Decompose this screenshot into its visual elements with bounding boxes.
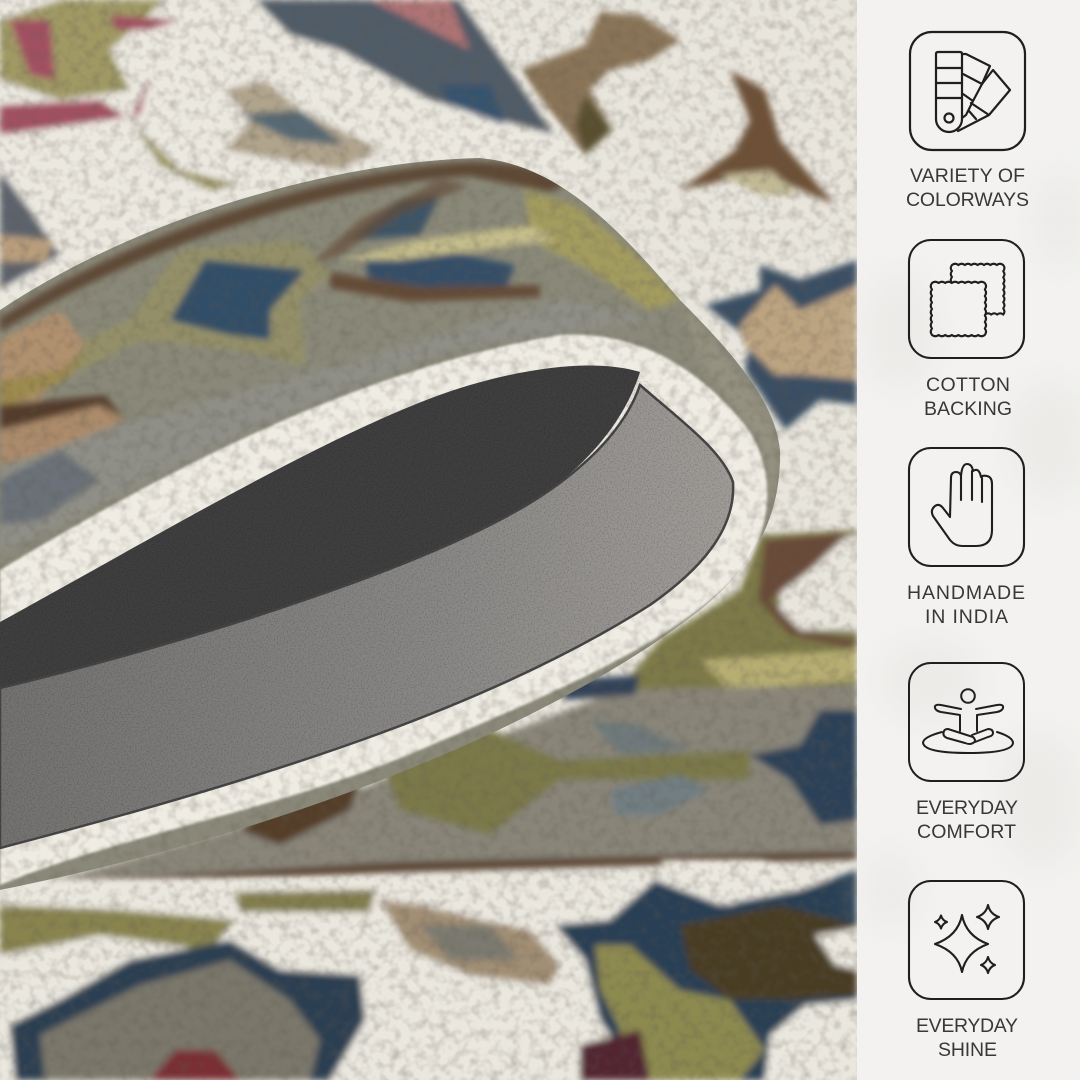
icon: open hand	[909, 448, 1024, 566]
label: VARIETY OF	[910, 165, 1025, 187]
grey rug backing, lower fold	[0, 385, 733, 848]
feature: everyday comfort	[909, 663, 1024, 843]
sidebar panel	[857, 0, 1080, 1080]
feature: variety of colorways	[906, 32, 1029, 211]
feature: variety of colorways: COLORWAYS	[906, 189, 1029, 211]
icon: seated meditation figure	[909, 663, 1024, 781]
loop pile texture	[0, 0, 857, 1080]
rug lower field and border band	[40, 530, 857, 888]
fine weave texture on the backing	[0, 366, 732, 848]
icon: sparkles	[909, 881, 1024, 999]
feature: handmade in india: IN INDIA	[925, 606, 1008, 628]
white rim of the roll	[0, 335, 767, 885]
feature: everyday shine	[909, 881, 1024, 1061]
label: EVERYDAY	[916, 797, 1018, 819]
feature: cotton backing	[909, 240, 1024, 420]
label: EVERYDAY	[916, 1015, 1018, 1037]
icon: colour fan deck	[910, 32, 1025, 150]
icon: fabric swatches	[909, 240, 1024, 358]
feature: handmade in india	[907, 448, 1025, 628]
dark rug backing, inner fold	[0, 366, 640, 690]
rug photograph	[0, 0, 857, 1080]
label: HANDMADE	[907, 582, 1025, 604]
rug top field, upper face of the roll	[0, 0, 595, 315]
label: COTTON	[926, 374, 1010, 396]
rug field motifs, top right	[520, 12, 857, 430]
rug bottom field and motifs	[0, 860, 857, 1080]
roll of the rug, folded border	[0, 158, 780, 890]
feature: everyday shine: SHINE	[938, 1039, 997, 1061]
feature: cotton backing: BACKING	[924, 398, 1012, 420]
sidebar mottling	[865, 170, 1080, 930]
feature: everyday comfort: COMFORT	[917, 821, 1016, 843]
